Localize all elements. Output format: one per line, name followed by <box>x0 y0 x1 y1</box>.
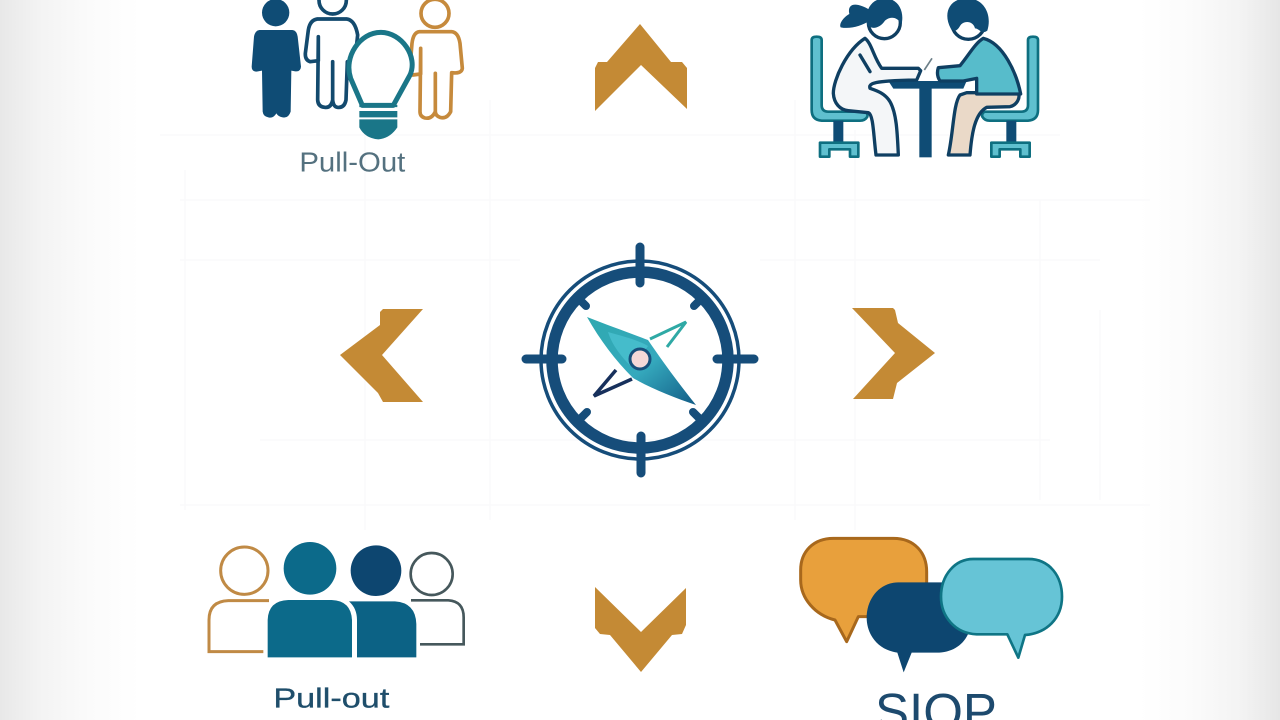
icon: left chair <box>812 37 868 157</box>
icon: lightbulb <box>349 32 412 139</box>
label: Pull-out: Pull-out <box>273 682 390 713</box>
compass needle <box>587 317 696 405</box>
icon: navy speech bubble <box>867 582 972 672</box>
icon: central compass <box>526 247 754 473</box>
icon: orange speech bubble <box>801 538 927 642</box>
icon: outlined navy person <box>305 0 358 107</box>
icon: outlined gold person <box>410 0 462 118</box>
arrow: down chevron <box>595 587 686 672</box>
compass tick marks <box>526 247 754 473</box>
icon: light blue speech bubble <box>941 559 1062 658</box>
icon: pen <box>924 58 932 70</box>
arrow: up chevron <box>595 24 687 111</box>
icon: two people meeting at a table <box>812 0 1038 157</box>
compass hub <box>630 349 650 369</box>
icon: navy person <box>349 545 416 657</box>
icon: navy filled person <box>252 0 301 118</box>
arrow: left chevron <box>340 309 423 402</box>
compass teal pointer <box>650 322 686 347</box>
icon: right seated man <box>937 0 1021 155</box>
icon: gold outlined person <box>209 547 269 652</box>
icon: pull-out team of four <box>209 542 464 713</box>
icon: grey outlined person <box>411 553 464 644</box>
label: Pull-Out: Pull-Out <box>299 146 406 177</box>
icon: pull-out group with lightbulb <box>252 0 462 177</box>
icon: right chair <box>982 37 1038 157</box>
icon: left seated woman <box>833 0 921 155</box>
icon: SIOP speech bubbles <box>801 538 1062 720</box>
icon: teal person <box>268 542 352 657</box>
arrow: right chevron <box>852 308 935 399</box>
compass rings <box>541 261 739 459</box>
compass navy pointer <box>594 370 632 396</box>
icon: table <box>888 81 967 157</box>
